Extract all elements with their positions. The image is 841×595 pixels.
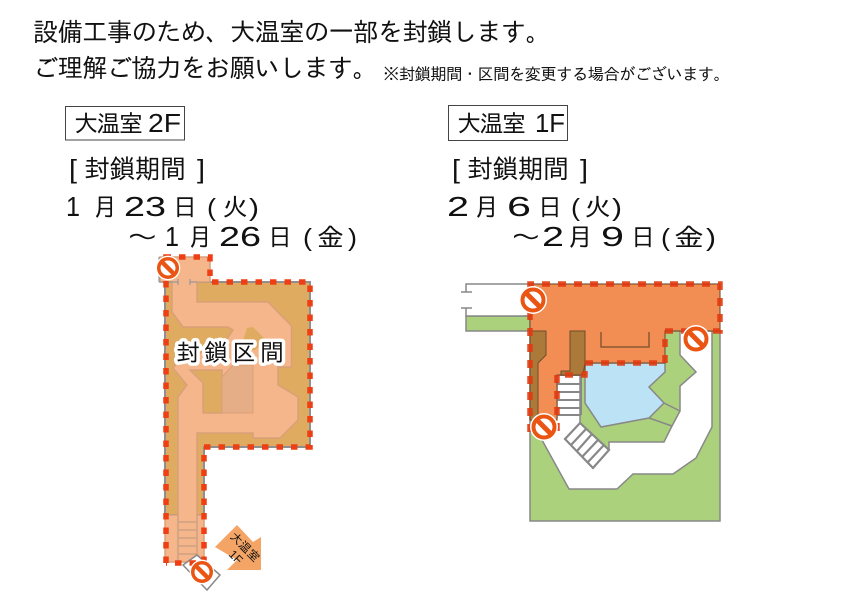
text: 2F closure period: 封鎖期間 bbox=[84, 154, 186, 184]
floor area: tan base bbox=[165, 282, 310, 515]
text: 1F closure period: ( bbox=[571, 194, 581, 222]
text: 2F closure period: 月 bbox=[188, 224, 212, 252]
text: 2F closure period: 26 bbox=[219, 221, 261, 252]
stairs: diagonal bbox=[565, 423, 609, 468]
text: 2F closure period: 23 bbox=[124, 191, 166, 222]
text: 2F closure period bbox=[66, 154, 357, 252]
counter outline bbox=[601, 332, 649, 347]
text: 1F closure period: 2 bbox=[447, 191, 469, 222]
text: 1F closure period: 月 bbox=[474, 194, 499, 222]
text: 1F closure period: 日 bbox=[538, 194, 562, 222]
heading: 2F label box: 大温室 bbox=[74, 111, 143, 138]
icon: no entry right bbox=[682, 325, 710, 353]
closure boundary dashed bbox=[530, 284, 720, 432]
closed area: orange floor bbox=[530, 284, 720, 420]
door: bottom diamond bbox=[183, 555, 220, 590]
heading: 1F label box bbox=[448, 106, 568, 140]
text: 2F closure period: ( bbox=[303, 224, 313, 252]
title: closure notice: 設備工事のため、大温室の一部を封鎖します。 bbox=[33, 19, 551, 47]
text: 1F closure period: 9 bbox=[601, 221, 624, 252]
text: 2F closure period: ) bbox=[348, 224, 357, 252]
text: 2F closure period: [ bbox=[69, 154, 78, 184]
darker room bbox=[222, 365, 253, 413]
text: 2F closure period: 日 bbox=[173, 194, 197, 222]
pond: blue water bbox=[585, 363, 665, 427]
icon: no entry lower left bbox=[530, 413, 558, 441]
text: 2F closure period: 1 bbox=[66, 191, 80, 222]
text: 2F closure period: 日 bbox=[268, 224, 292, 252]
text: 1F closure period bbox=[447, 154, 716, 252]
label: closed section: 封鎖区間 bbox=[176, 340, 284, 367]
text: 1F closure period: 封鎖期間 bbox=[467, 154, 569, 184]
text: 2F closure period: ( bbox=[207, 194, 217, 222]
text: 2F closure period: 金 bbox=[317, 224, 344, 252]
text: 1F closure period: ～ bbox=[511, 224, 541, 252]
text: 2F closure period: 火 bbox=[222, 194, 248, 222]
icon: no entry upper left bbox=[519, 286, 547, 314]
icon: no entry top bbox=[156, 256, 180, 280]
stairs bbox=[178, 515, 197, 560]
map: 1F floor plan bbox=[461, 284, 720, 521]
text: 1F closure period: 6 bbox=[507, 191, 531, 222]
text: 2F closure period: ] bbox=[197, 154, 205, 184]
heading: 2F label box: 2F bbox=[148, 108, 181, 138]
title: closure notice bbox=[33, 19, 551, 83]
text: 1F closure period: [ bbox=[452, 154, 461, 184]
text: 1F closure period: 金 bbox=[674, 224, 704, 252]
heading: 1F label box: 1F bbox=[535, 108, 565, 138]
text: 1F closure period: ( bbox=[661, 224, 671, 252]
text: 1F closure period: 日 bbox=[631, 224, 655, 252]
inner tan block bbox=[190, 370, 222, 413]
arrow: to 1F: 大温室 bbox=[227, 529, 263, 565]
text: 2F closure period: 1 bbox=[165, 221, 179, 252]
text: 2F closure period: ) bbox=[249, 194, 259, 222]
text: 2F closure period: ～ bbox=[127, 224, 158, 252]
closure boundary dashed bbox=[166, 257, 310, 563]
text: 1F closure period: 月 bbox=[567, 224, 593, 252]
stairs: vertical bbox=[557, 375, 581, 415]
walkway: white path bbox=[530, 331, 712, 489]
note: schedule may change: ※封鎖期間・区間を変更する場合がございます。 bbox=[383, 66, 730, 84]
brown room right bbox=[561, 331, 585, 375]
text: 1F closure period: ] bbox=[580, 154, 588, 184]
brown room left bbox=[530, 331, 546, 420]
arrow: to 1F bbox=[215, 525, 263, 570]
annex: white room and green strip bbox=[461, 284, 530, 331]
text: 1F closure period: ) bbox=[612, 194, 622, 222]
text: 2F closure period: 月 bbox=[93, 194, 117, 222]
icon: no entry bottom bbox=[190, 560, 214, 584]
text: 1F closure period: 2 bbox=[542, 221, 564, 252]
heading: 2F label box bbox=[66, 106, 184, 140]
text: 1F closure period: ) bbox=[706, 224, 716, 252]
corridor: peach walkway bbox=[160, 257, 298, 562]
map: 2F floor plan bbox=[156, 256, 310, 590]
arrow: to 1F: 1F bbox=[226, 547, 246, 567]
garden: green ground bbox=[530, 331, 720, 521]
garden dividers bbox=[649, 403, 680, 426]
text: 1F closure period: 火 bbox=[584, 194, 611, 222]
title: closure notice: ご理解ご協力をお願いします。 bbox=[33, 55, 378, 83]
walkway inner tan chevron bbox=[240, 327, 266, 350]
door marks bbox=[159, 257, 197, 285]
heading: 1F label box: 大温室 bbox=[457, 111, 526, 138]
